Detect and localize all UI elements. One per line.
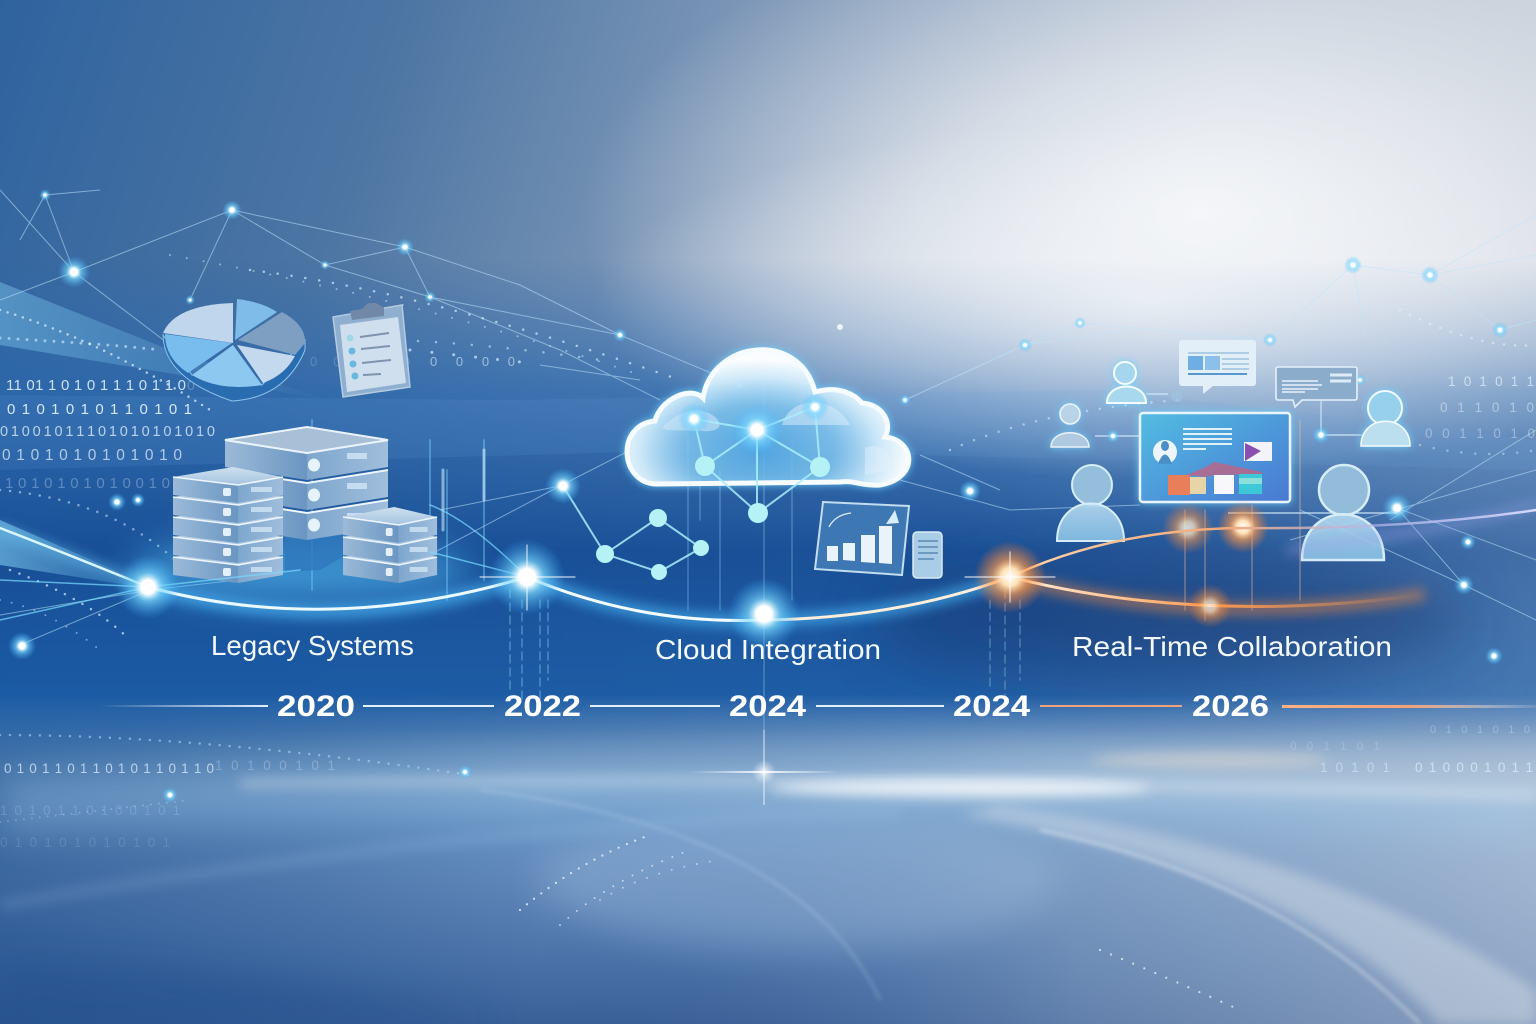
light streaks <box>0 282 1536 1024</box>
icon: person large right <box>1302 465 1384 560</box>
binary text right: 0 1 1 0 1 0 <box>1440 400 1534 415</box>
icon: bar chart tablet <box>815 502 909 575</box>
binary text lower <box>0 724 1533 850</box>
icon: server stack right <box>343 507 437 583</box>
icon: phone <box>913 532 942 578</box>
year 2024: 2024 <box>729 690 806 723</box>
binary text lower: 1 0 1 0 1 <box>1320 760 1390 775</box>
binary text left: 0 1 1 0 <box>187 377 247 393</box>
year 2022: 2022 <box>504 690 581 723</box>
label: Real-Time Collaboration: Real-Time Collaboration <box>1072 631 1392 662</box>
dotted particle trails <box>0 255 1536 1010</box>
binary text lower: 1 0 1 0 0 1 0 1 <box>215 758 335 773</box>
icon: speech bubble 1 <box>1179 340 1256 394</box>
icon: server stack left <box>173 467 283 583</box>
binary text left: 1 0 1 0 1 0 1 0 1 0 0 1 0 <box>5 475 170 492</box>
icon: person top <box>1107 362 1146 403</box>
year 2024 second: 2024 <box>953 690 1030 723</box>
binary text right: 1 0 1 0 1 1 <box>1448 374 1534 389</box>
binary text lower: 0 1 0 1 0 1 0 1 0 1 0 1 <box>0 835 170 850</box>
icon: person large left <box>1057 465 1124 541</box>
binary text upper middle: 0 0 0 1 0 <box>310 354 410 369</box>
binary text lower: 0 1 0 1 1 0 1 1 0 1 0 1 1 0 1 1 0 <box>4 761 214 776</box>
network nodes background <box>8 189 1508 803</box>
label: Cloud Integration: Cloud Integration <box>655 634 881 665</box>
icon: presentation screen <box>1140 413 1290 502</box>
year 2020: 2020 <box>277 690 355 723</box>
binary text right <box>1425 374 1535 441</box>
timeline curve <box>0 505 1536 650</box>
binary text lower: 1 0 1 0 1 1 0 1 0 0 1 0 1 <box>0 803 180 818</box>
icon: cloud <box>627 350 909 485</box>
collaboration nodes <box>1106 390 1412 554</box>
icon: person small left <box>1051 404 1089 447</box>
label: Legacy Systems: Legacy Systems <box>211 630 414 661</box>
icon: pie chart <box>163 299 305 401</box>
binary text upper middle: 0 0 0 0 <box>430 354 515 369</box>
network diagram <box>545 393 830 580</box>
year 2026: 2026 <box>1192 690 1269 723</box>
binary text left: 0 1 0 1 0 1 0 1 1 0 1 0 1 <box>7 401 192 418</box>
binary text left: 11 01 1 0 1 0 1 1 1 0 1 1 0 <box>6 377 186 394</box>
icon: person headset <box>1361 391 1410 446</box>
lens flare lower <box>690 324 843 805</box>
connector lines <box>1095 394 1397 513</box>
binary text right: 0 0 1 1 0 1 0 <box>1425 426 1535 441</box>
icon: clipboard <box>333 303 410 397</box>
icon: server tower large <box>225 427 388 572</box>
icon: speech bubble 2 <box>1276 367 1357 407</box>
binary text lower: 0 1 0 0 0 1 0 1 1 <box>1415 760 1533 775</box>
binary text left <box>0 377 247 492</box>
binary text upper middle <box>310 354 515 369</box>
binary text left: 0 1 0 1 0 1 0 1 0 1 0 1 0 <box>2 447 182 464</box>
binary text left: 0 1 0 0 1 0 1 1 1 0 1 0 1 0 1 0 1 0 1 0 <box>0 424 215 440</box>
timeline axis <box>100 690 1536 723</box>
binary text lower: 0 0 1 1 0 1 <box>1290 739 1380 753</box>
center stage: cloud integration icons <box>545 350 942 580</box>
left stage: legacy systems icons <box>130 299 470 600</box>
vertical data streaks <box>312 350 1300 730</box>
network lines <box>0 190 1536 645</box>
right stage: collaboration icons <box>1051 340 1412 560</box>
binary text lower: 0 1 0 1 0 1 0 <box>1430 724 1530 736</box>
glow behind servers <box>130 540 470 600</box>
